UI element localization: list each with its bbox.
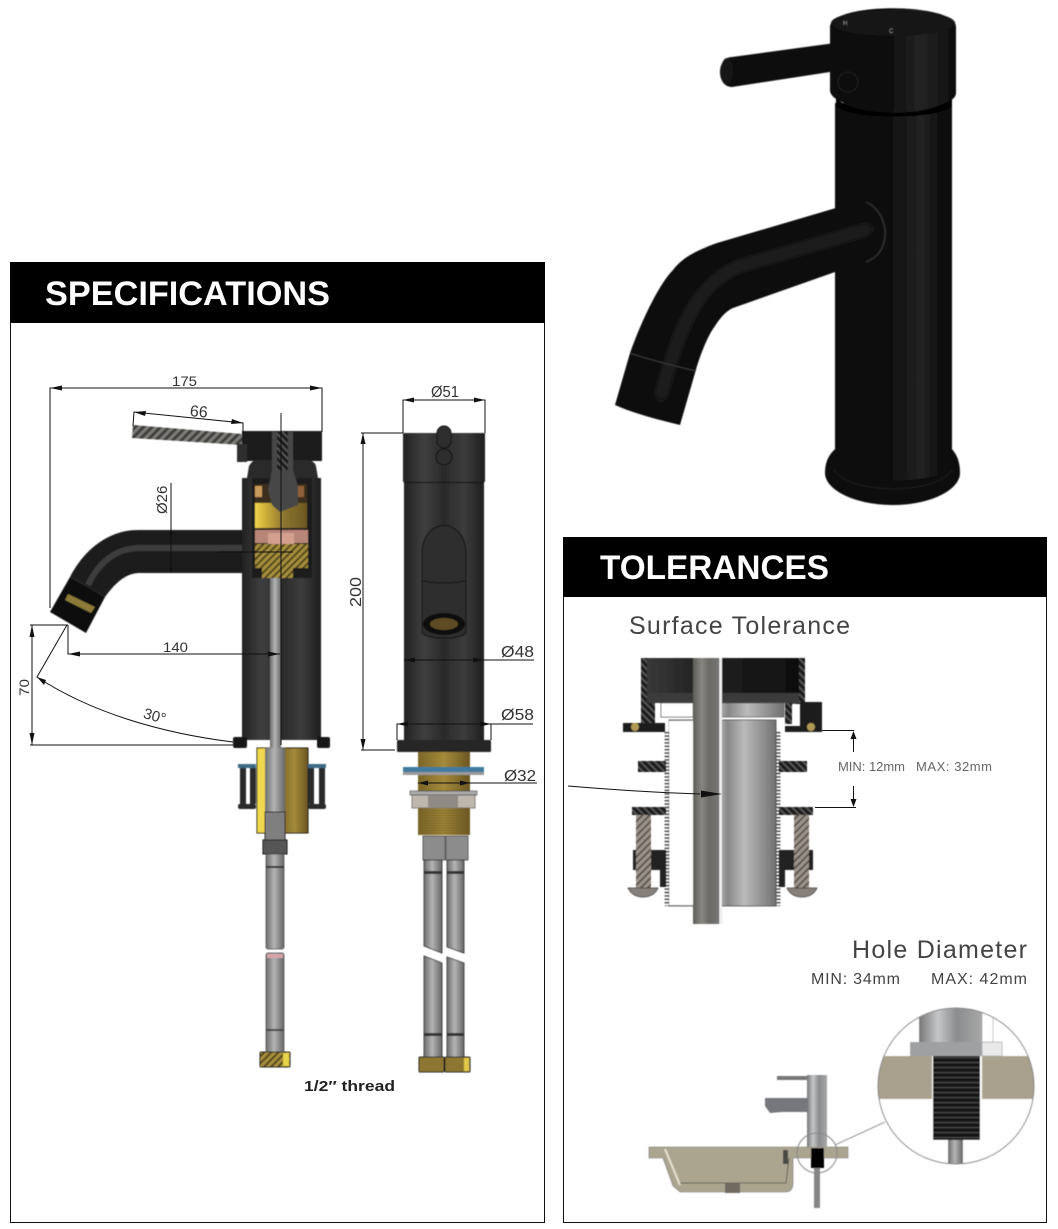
- label: thread size: 1/2″ thread: [304, 1078, 395, 1095]
- dimension 175: 175: [172, 373, 197, 389]
- dimension diameter 32: Ø32: [504, 768, 536, 785]
- illustration: sink with tap: [649, 1075, 885, 1208]
- dimension 200: 200: [348, 577, 365, 607]
- dimension: surface thickness: MAX: 32mm: [916, 759, 992, 774]
- head markings: H: [843, 21, 847, 27]
- dimension 66: 66: [189, 403, 208, 422]
- black body: [641, 658, 805, 694]
- collar: [836, 97, 952, 116]
- panel: specifications: [10, 262, 545, 1222]
- dimension 66: [133, 403, 243, 434]
- panel: tolerances: [563, 537, 1047, 1222]
- detail circle: threaded tail through counter: [878, 1008, 1034, 1166]
- dimension 140: 140: [163, 639, 188, 655]
- product photo: matte black basin mixer: [615, 8, 960, 505]
- tap body: [807, 1075, 827, 1147]
- hose connectors: [423, 836, 445, 860]
- base: [397, 740, 491, 752]
- dimension diameter 58: [397, 707, 534, 740]
- dimension 140: [68, 625, 280, 656]
- angle 30 degrees: [37, 625, 233, 742]
- side section drawing of tap: [50, 425, 330, 1067]
- right flange: [785, 702, 822, 732]
- dimension: surface thickness: MIN: 12mm: [838, 759, 905, 774]
- dimension diameter 26: [154, 483, 173, 573]
- aerator nozzle: [50, 577, 105, 633]
- heading: tolerances: TOLERANCES: [600, 549, 829, 587]
- spout highlight: [660, 202, 885, 400]
- braided hose upper: [266, 854, 284, 949]
- hose connector: [265, 812, 285, 844]
- angle 30 degrees: 30°: [141, 705, 168, 728]
- dimension: surface thickness: [815, 730, 992, 808]
- spout section: [70, 530, 243, 597]
- head section: [242, 431, 322, 461]
- dimension diameter 48: Ø48: [501, 644, 534, 661]
- head: [403, 433, 485, 482]
- arrow: pointer to rod: [568, 786, 722, 798]
- dimension diameter 51: [403, 384, 485, 433]
- brass tail: [257, 748, 270, 833]
- head markings: [843, 21, 894, 35]
- internal hose rod: [270, 578, 281, 833]
- small detail circle and leader: [797, 1133, 837, 1173]
- lever section: [132, 425, 242, 445]
- dimension 70: 70: [16, 679, 32, 696]
- head: [830, 8, 956, 110]
- spout: [615, 200, 886, 425]
- threaded tube: [669, 720, 776, 906]
- section drawing: surface tolerance: [623, 658, 822, 924]
- left and right washers: [632, 761, 813, 815]
- text: hole diameter limits: MIN: 34mm: [811, 971, 900, 988]
- dimension diameter 51: Ø51: [431, 384, 459, 401]
- dimension diameter 58: Ø58: [501, 707, 534, 724]
- brass hatched block: [255, 544, 308, 578]
- pink seal: [255, 530, 308, 543]
- dimension 175: [50, 373, 322, 608]
- tap tail: [811, 1148, 824, 1168]
- text: hole diameter limits: MAX: 42mm: [931, 971, 1027, 988]
- text: hole diameter limits: [811, 971, 1027, 988]
- head markings: C: [889, 29, 894, 35]
- spout front: [422, 526, 466, 638]
- tube threads: [667, 732, 778, 906]
- lever end: [437, 426, 451, 448]
- spout centre lines: [218, 413, 293, 745]
- clamp screws: [628, 815, 817, 897]
- mounting nuts and thread: [418, 752, 470, 791]
- spindle: [268, 432, 298, 512]
- cartridge cavity: [252, 478, 312, 578]
- front view drawing of tap: [397, 426, 491, 1072]
- brass nut: [260, 1052, 290, 1067]
- brass nuts: [419, 1057, 444, 1072]
- dimension diameter 32: [418, 768, 537, 786]
- hoses upper: [424, 860, 442, 953]
- mixer body: [835, 103, 952, 480]
- body: [242, 478, 321, 740]
- dimensions: front view: [348, 384, 537, 786]
- heading: specifications: [10, 262, 545, 323]
- left flange: [623, 723, 665, 732]
- heading: tolerances: [563, 537, 1047, 597]
- dimension 200: [348, 433, 403, 750]
- dimensions: side view: [16, 373, 322, 745]
- dimension diameter 26: Ø26: [154, 486, 171, 514]
- sink: [649, 1147, 848, 1192]
- central rod: [693, 658, 722, 924]
- brass cartridge: [255, 503, 307, 528]
- base plate: [825, 440, 960, 505]
- body foot: [233, 737, 247, 748]
- dimension diameter 48: [404, 644, 534, 662]
- mounting hardware: [238, 764, 326, 809]
- subheading: hole diameter: Hole Diameter: [852, 936, 1027, 964]
- braided hose lower: [266, 953, 284, 1052]
- clamp nuts: [633, 850, 813, 887]
- lever handle: [720, 43, 860, 87]
- body: [404, 480, 484, 742]
- subheading: surface tolerance: Surface Tolerance: [629, 612, 850, 640]
- hoses lower: [424, 956, 442, 1057]
- dimension 70: [16, 625, 233, 745]
- heading: specifications: SPECIFICATIONS: [45, 275, 330, 313]
